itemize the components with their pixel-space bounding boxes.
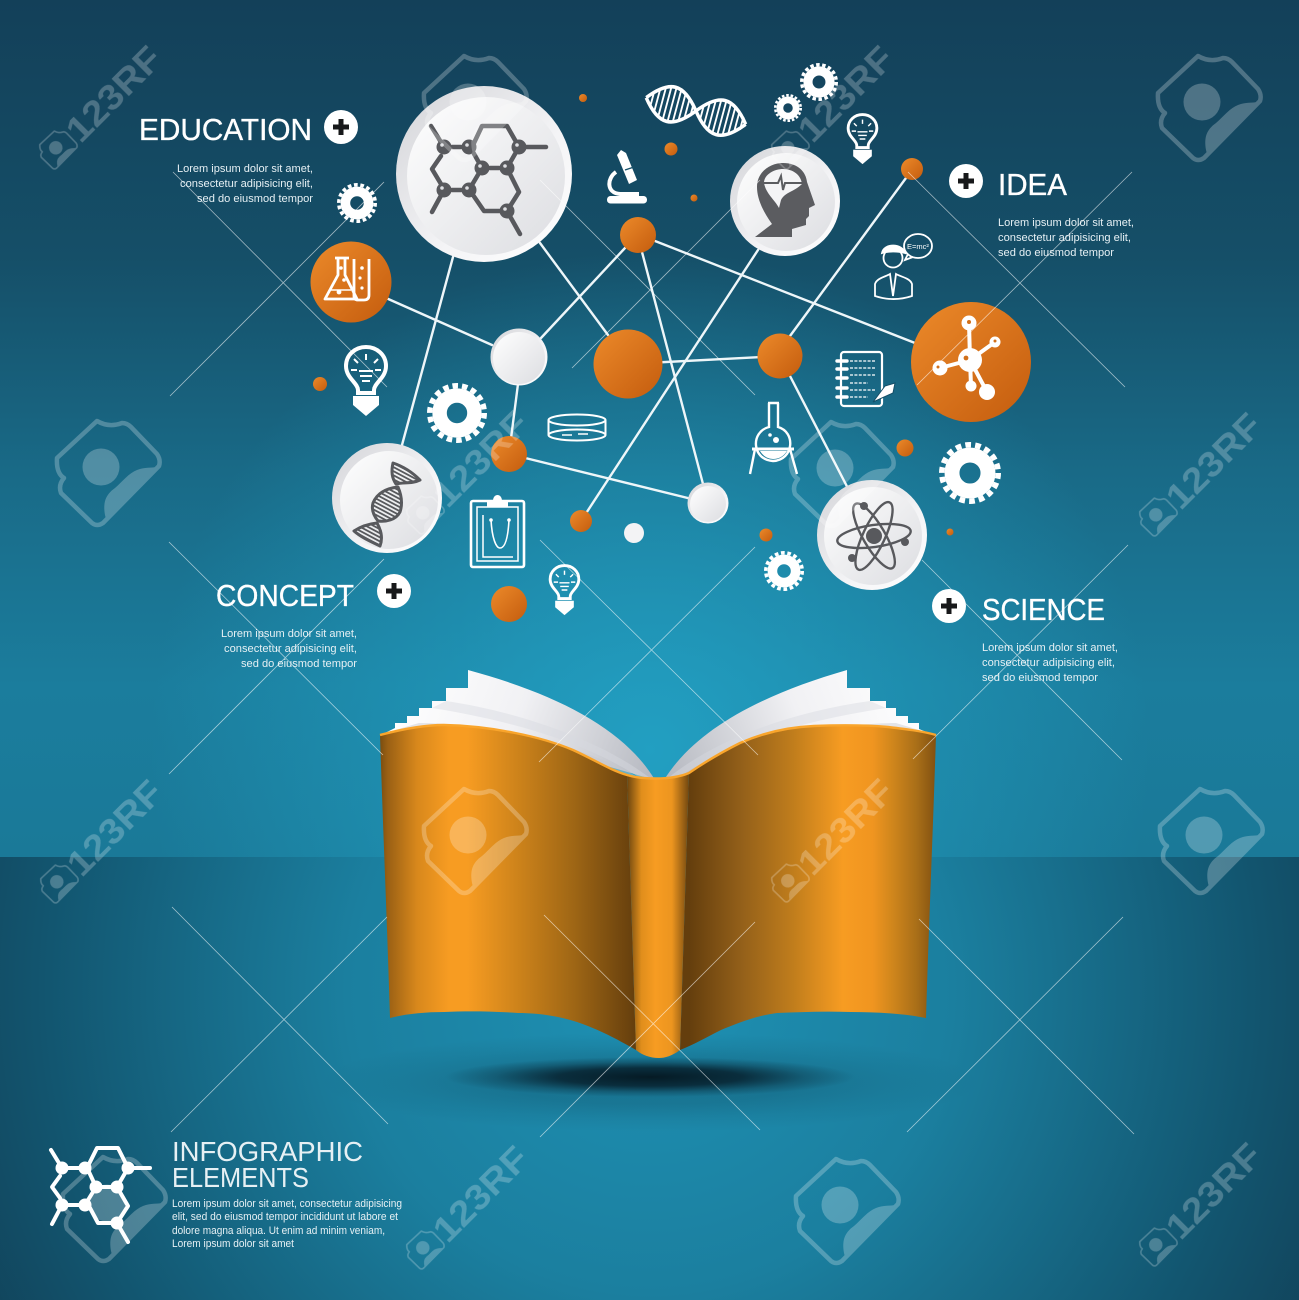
heading: infographic elements xyxy=(172,1136,363,1193)
watermark logos: 123RF xyxy=(1159,1136,1270,1247)
icon: dna top xyxy=(642,80,750,142)
text block: infographic body: Lorem ipsum dolor sit amet xyxy=(172,1238,294,1250)
text block: infographic body xyxy=(172,1198,402,1250)
icon: gear xyxy=(775,95,801,121)
icon: gear xyxy=(942,445,998,501)
icon: gear xyxy=(802,65,836,99)
text block: idea body: consectetur adipisicing elit, xyxy=(998,232,1131,244)
text block: science body: consectetur adipisicing elit, xyxy=(982,657,1115,669)
text block: concept body: Lorem ipsum dolor sit amet, xyxy=(221,628,357,640)
icon: petri dish xyxy=(548,414,606,440)
heading: science xyxy=(932,589,1105,627)
icon: dna helix xyxy=(354,463,420,546)
text block: education body: sed do eiusmod tempor xyxy=(197,193,313,205)
white node: atom xyxy=(817,480,927,590)
icon: molecule xyxy=(932,316,1000,400)
text block: infographic body: elit, sed do eiusmod tempor incididunt ut labore et xyxy=(172,1211,398,1223)
text block: science body: sed do eiusmod tempor xyxy=(982,672,1098,684)
icon: plus button xyxy=(932,589,966,623)
icon: plus button xyxy=(324,110,358,144)
orange node: molecule xyxy=(911,302,1031,422)
watermark logos: 123RF xyxy=(426,1139,537,1250)
text block: idea body: sed do eiusmod tempor xyxy=(998,247,1114,259)
icon: scientist with speech bubble xyxy=(875,234,932,299)
icon: clipboard with graph xyxy=(471,495,524,567)
icon: gear xyxy=(339,185,375,221)
text block: concept body: sed do eiusmod tempor xyxy=(241,658,357,670)
heading: infographic elements: INFOGRAPHIC xyxy=(172,1136,363,1167)
icon: head silhouette xyxy=(755,163,815,237)
orange node: flask xyxy=(310,242,392,322)
watermark logos: 123RF xyxy=(60,773,171,884)
watermark thin cross lines xyxy=(169,172,1134,1137)
text block: concept body xyxy=(221,628,357,670)
icon: light bulb large xyxy=(346,347,386,416)
white node: brain head xyxy=(730,146,840,256)
panel: network of connections xyxy=(310,86,1031,622)
icon: lab flask and test tube xyxy=(325,258,369,300)
text block: idea body xyxy=(998,217,1134,259)
icon: hexagon molecule xyxy=(431,126,546,234)
watermark logos: 123RF xyxy=(59,39,170,150)
left pages xyxy=(385,670,655,780)
text block: science body xyxy=(982,642,1118,684)
icon: notebook xyxy=(837,352,895,406)
heading: education: EDUCATION xyxy=(139,112,312,147)
text block: education body xyxy=(177,163,313,205)
cover top edge xyxy=(380,725,936,778)
orange joint nodes xyxy=(313,94,954,622)
heading: idea xyxy=(949,164,1067,202)
right pages xyxy=(664,670,929,780)
text block: education body: consectetur adipisicing elit, xyxy=(180,178,313,190)
left cover xyxy=(380,725,636,1050)
icon: bottom chemistry structure xyxy=(51,1148,150,1242)
heading: infographic elements: ELEMENTS xyxy=(172,1162,309,1193)
text block: concept body: consectetur adipisicing elit, xyxy=(224,643,357,655)
background wall xyxy=(0,0,1299,857)
watermark logos: 123RF xyxy=(791,772,902,883)
text block: idea body: Lorem ipsum dolor sit amet, xyxy=(998,217,1134,229)
heading: science: SCIENCE xyxy=(982,592,1105,627)
heading: idea: IDEA xyxy=(998,167,1067,202)
text block: infographic body: dolore magna aliqua. Ut enim ad minim veniam, xyxy=(172,1225,385,1237)
icon: plus button xyxy=(377,574,411,608)
open book xyxy=(380,670,936,1058)
icon: atom xyxy=(836,498,912,574)
white joint nodes xyxy=(490,328,728,543)
watermark logos: 123RF xyxy=(426,404,537,515)
icon: gear xyxy=(430,386,484,440)
icon: light bulb bottom xyxy=(550,566,579,615)
icon: plus button xyxy=(949,164,983,198)
text block: science body: Lorem ipsum dolor sit amet, xyxy=(982,642,1118,654)
watermark logos: 123RF xyxy=(1159,406,1270,517)
watermark logos: 123RF xyxy=(791,39,902,150)
text block: infographic body: Lorem ipsum dolor sit amet, consectetur adipisicing xyxy=(172,1198,402,1210)
icon: round flask on stand xyxy=(750,403,797,474)
icon: light bulb top right xyxy=(848,115,877,164)
heading: concept xyxy=(216,574,411,613)
background floor xyxy=(0,857,1299,1300)
white node: dna xyxy=(332,443,442,553)
white node: chemistry structure xyxy=(396,86,572,262)
right cover xyxy=(680,725,936,1050)
book shadow xyxy=(320,1032,980,1132)
spine xyxy=(627,773,689,1058)
equation: E=mc² xyxy=(907,242,929,251)
text block: education body: Lorem ipsum dolor sit amet, xyxy=(177,163,313,175)
icon: gear xyxy=(766,553,802,589)
heading: concept: CONCEPT xyxy=(216,578,354,613)
connector lines xyxy=(386,178,915,535)
icon: microscope xyxy=(607,150,647,204)
